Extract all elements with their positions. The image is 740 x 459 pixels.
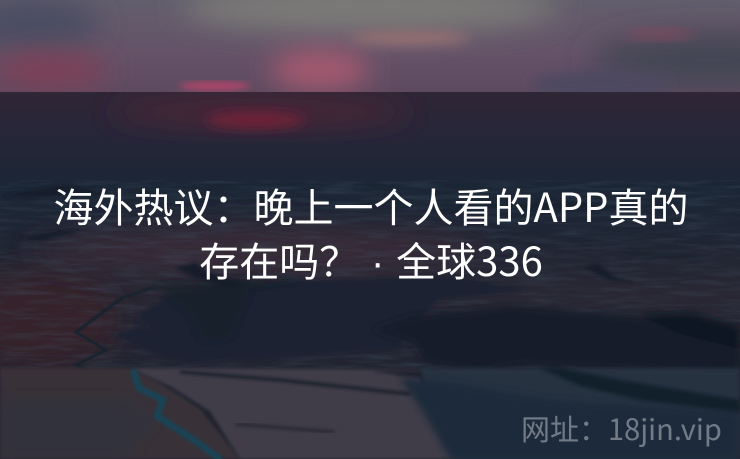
water ripple texture	[0, 180, 740, 368]
foam edge line	[73, 286, 152, 368]
dark wave ridges	[0, 186, 700, 288]
wet sand foreground	[0, 368, 240, 459]
foreground foam line	[133, 370, 221, 459]
title: 存在吗？ 全球336	[199, 230, 543, 288]
sea and beach	[0, 92, 740, 459]
foam patches	[113, 276, 528, 362]
title: 海外热议：晚上一个人看的APP真的	[54, 176, 688, 234]
title	[54, 176, 688, 288]
sky	[0, 0, 740, 99]
title: ·	[371, 241, 384, 285]
watermark: 网址：18jin.vip	[521, 407, 722, 449]
